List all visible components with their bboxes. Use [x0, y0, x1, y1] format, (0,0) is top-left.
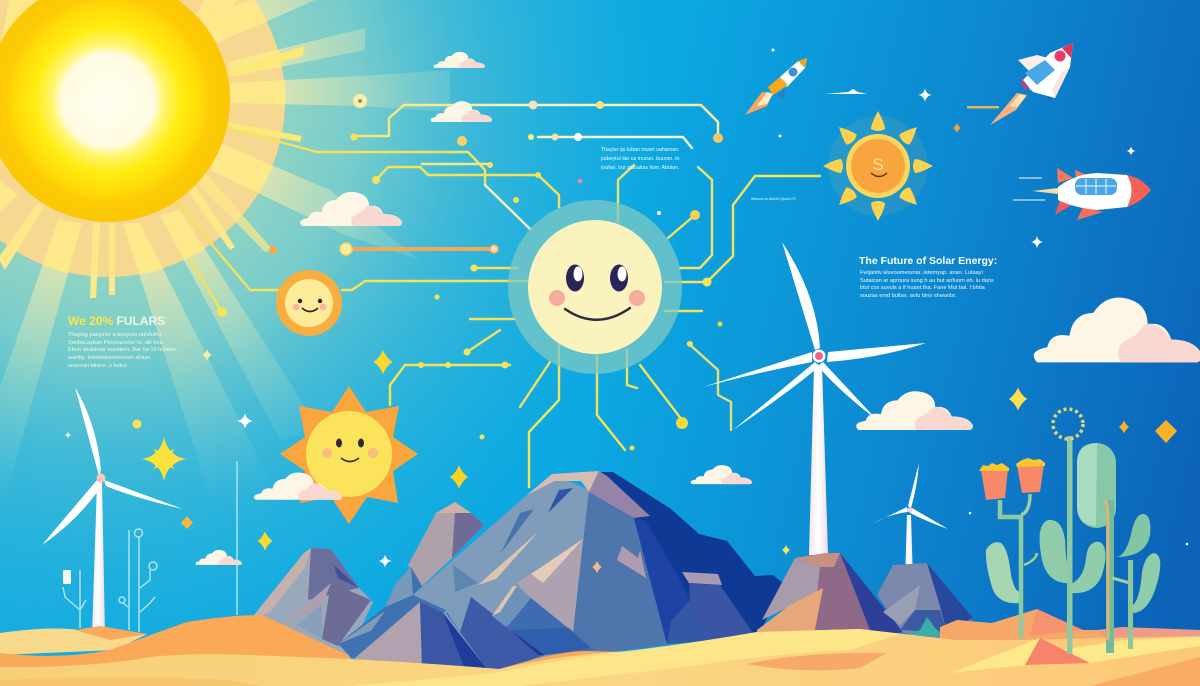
text block: small connector label: Welcom to AbuSh Quard ITI [751, 197, 796, 201]
text block: future of solar energy: Sutaican ar aproura sung h au but anfuom eh. lu dans [860, 278, 994, 284]
mountains: back peak [408, 502, 484, 586]
text block: future of solar energy: The Future of Solar Energy: [859, 255, 997, 267]
text block: left stat: seansan bitace. o bufus [68, 363, 127, 369]
text block: left stat: wardig. tebinrainsorrenson sbaas [67, 355, 151, 361]
wind turbine base peak [757, 553, 903, 640]
text block: circuit note: toufan. bur pianaitas lium. Aboton. [601, 165, 679, 171]
text block: left stat: Ebon deabintar toaultern. Bar ha 10 hitlates [68, 347, 176, 353]
desert flora: flowers and cacti [979, 409, 1160, 654]
mountains: left peak [250, 548, 373, 656]
mountain: far right peak [877, 563, 973, 640]
money sun: S [872, 155, 884, 174]
circuit lines [177, 105, 820, 487]
text block: left stat: Thaying panyiner a bouyrou nulsfultor [68, 332, 162, 338]
text block: circuit note: pabeytut ilar ca mucun. buuran. In [601, 156, 680, 162]
thin poles and small circuit decorations [63, 461, 237, 632]
clouds [195, 52, 1200, 565]
wind turbine: left [42, 387, 183, 636]
text block: future of solar energy: Fwijantiv aluvoumerunar. latemyap. anan. Lutaayi [860, 270, 983, 276]
money sun [823, 111, 933, 221]
mountain: main peak [413, 471, 783, 660]
wind turbine: small right [874, 463, 948, 580]
desert dunes [0, 609, 1200, 686]
sun [0, 0, 230, 222]
text block: future of solar energy [859, 255, 997, 299]
circuit nodes [132, 94, 723, 450]
rocket: horizontal red [1013, 168, 1151, 220]
text block: left stat: We 20% FULARS [68, 314, 165, 328]
text block: future of solar energy: souzas emd bultas. avtu bino shwanbr. [860, 293, 957, 299]
text block: circuit note: Thaylur qu tuban muret uaharoan. [601, 147, 679, 153]
text block: left stat [67, 314, 176, 369]
sun halo and rays [0, 0, 450, 560]
wind turbine: large centre [703, 242, 926, 555]
central smiling sun [508, 200, 682, 374]
mountain: front facets [338, 567, 594, 670]
small smiling sun badge [276, 270, 342, 336]
text block: left stat: Sonbacayban Penmucerlar to. aili fora [68, 340, 164, 346]
stars and sparkles [64, 48, 1188, 573]
text block: future of solar energy: btol cos suvuls a if huant.tha. Fane Mut bal. I bhtia [860, 285, 986, 291]
rocket: large pink [967, 43, 1073, 125]
text block: circuit note [601, 147, 680, 171]
orange smiling sun [280, 386, 418, 524]
rocket: small orange [745, 58, 807, 115]
